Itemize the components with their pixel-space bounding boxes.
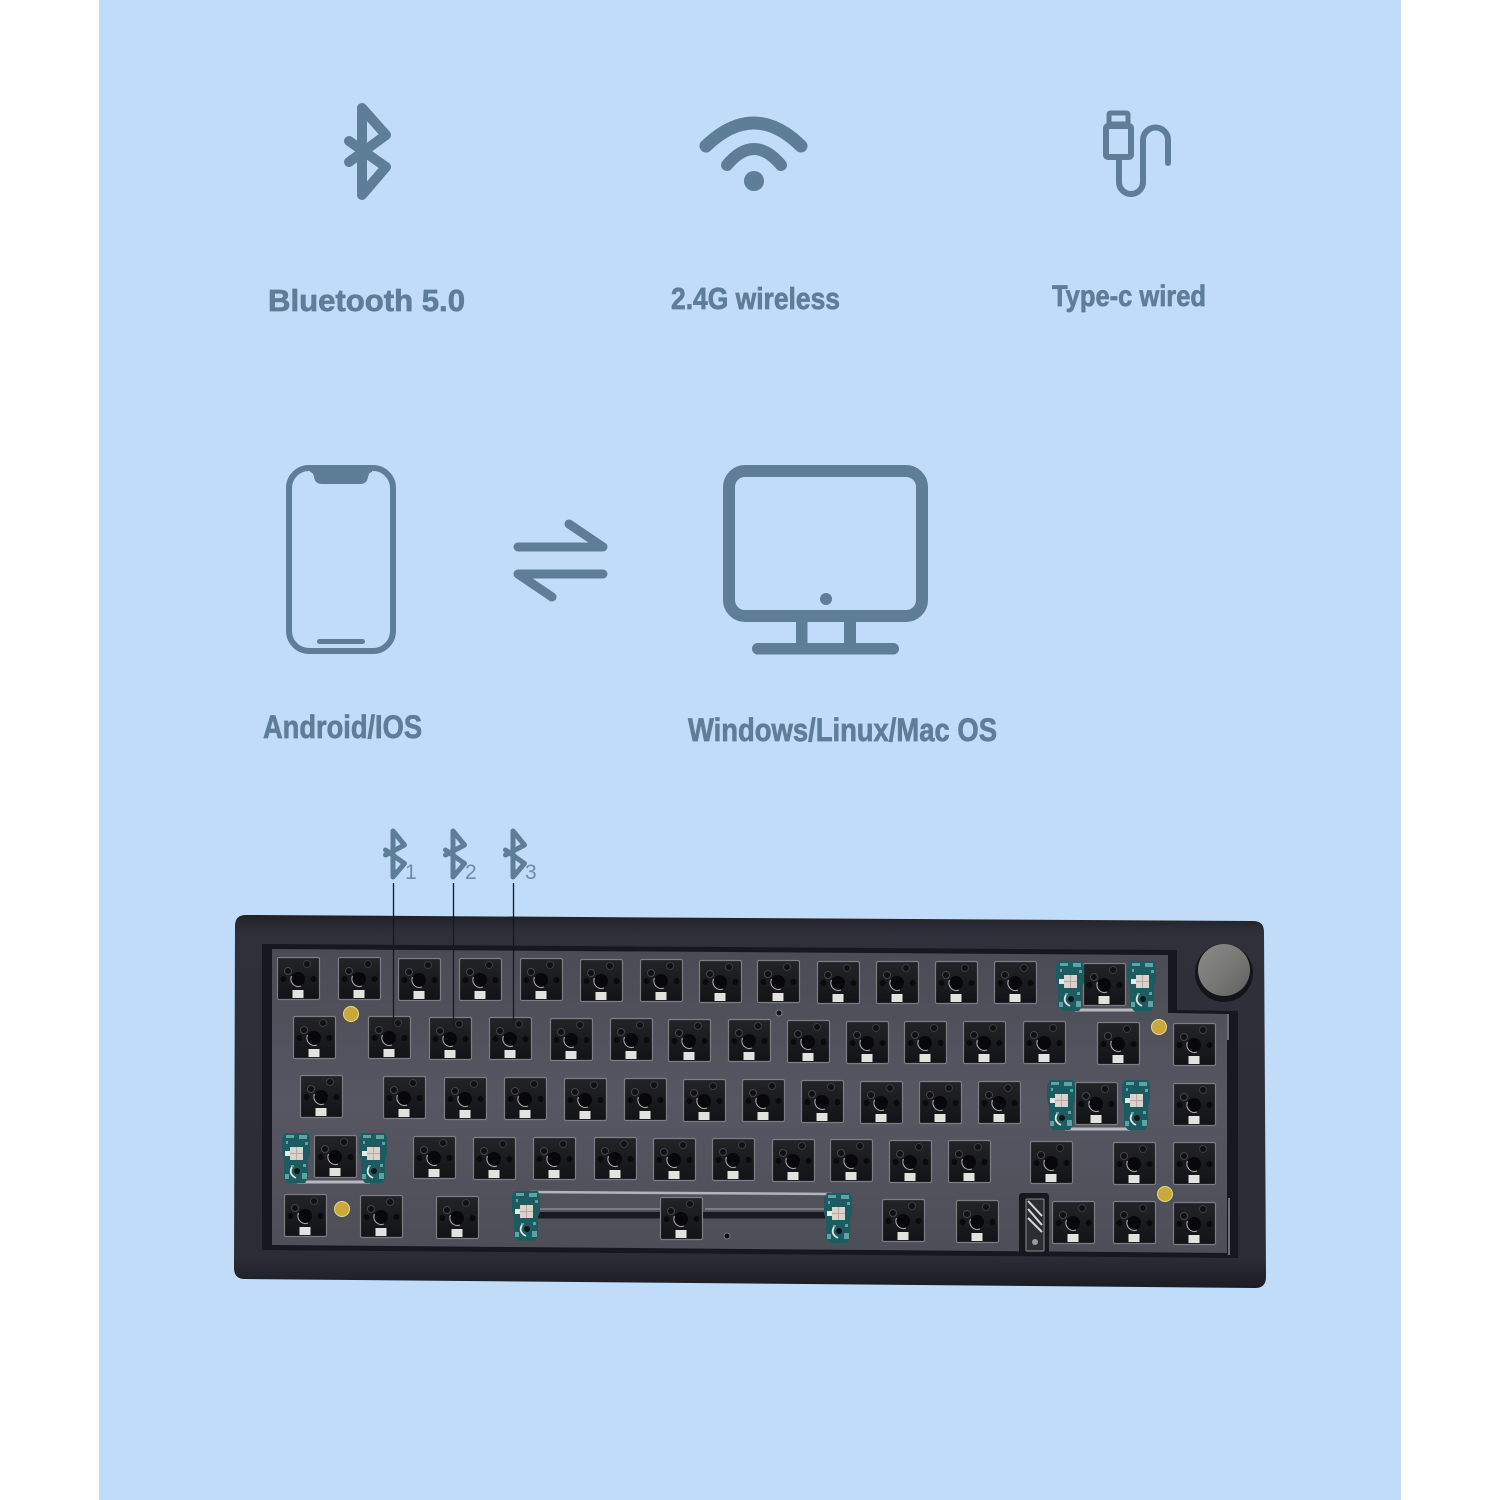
- bluetooth channel 2: 2: [465, 861, 477, 884]
- label: Bluetooth 5.0: Bluetooth 5.0: [268, 283, 465, 318]
- icon: monitor: [729, 471, 922, 654]
- switch sockets row 4: [314, 1136, 1216, 1184]
- icon: two-way arrows: [518, 524, 603, 597]
- bluetooth channel 1: 1: [405, 861, 417, 884]
- gold screws: [334, 1006, 1172, 1216]
- label: 2.4G wireless: 2.4G wireless: [671, 281, 840, 316]
- switch plate: [272, 949, 1227, 1253]
- wireless mode switch: [1019, 1193, 1049, 1255]
- switch sockets row 5: [284, 1194, 1216, 1244]
- icon: usb-c cable: [1106, 113, 1168, 194]
- switch sockets row 3: [300, 1076, 1216, 1126]
- icon: bluetooth: [349, 108, 386, 195]
- teal stabilizers: [282, 961, 1156, 1243]
- label: Type-c wired: Type-c wired: [1052, 280, 1206, 313]
- keyboard: [234, 883, 1266, 1288]
- keyboard case: [234, 915, 1266, 1288]
- switch sockets row 1: [278, 958, 1126, 1006]
- label: Android/IOS: Android/IOS: [263, 709, 422, 745]
- bluetooth channel lines: [394, 883, 514, 1027]
- switch sockets row 2: [294, 1016, 1216, 1066]
- bluetooth channel 2: [446, 831, 477, 884]
- knob: [1195, 944, 1253, 1002]
- icon: phone: [289, 466, 393, 651]
- label: Windows/Linux/Mac OS: Windows/Linux/Mac OS: [688, 712, 997, 748]
- bluetooth channel 3: [506, 831, 537, 884]
- icon: wifi: [706, 123, 801, 191]
- bluetooth channel 1: [386, 831, 417, 884]
- plate edge highlights: [1228, 1014, 1229, 1255]
- bluetooth channel 3: 3: [525, 861, 537, 884]
- spacebar slot and wires: [297, 1010, 1135, 1218]
- plate well: [262, 944, 1238, 1258]
- plate holes: [724, 1010, 782, 1239]
